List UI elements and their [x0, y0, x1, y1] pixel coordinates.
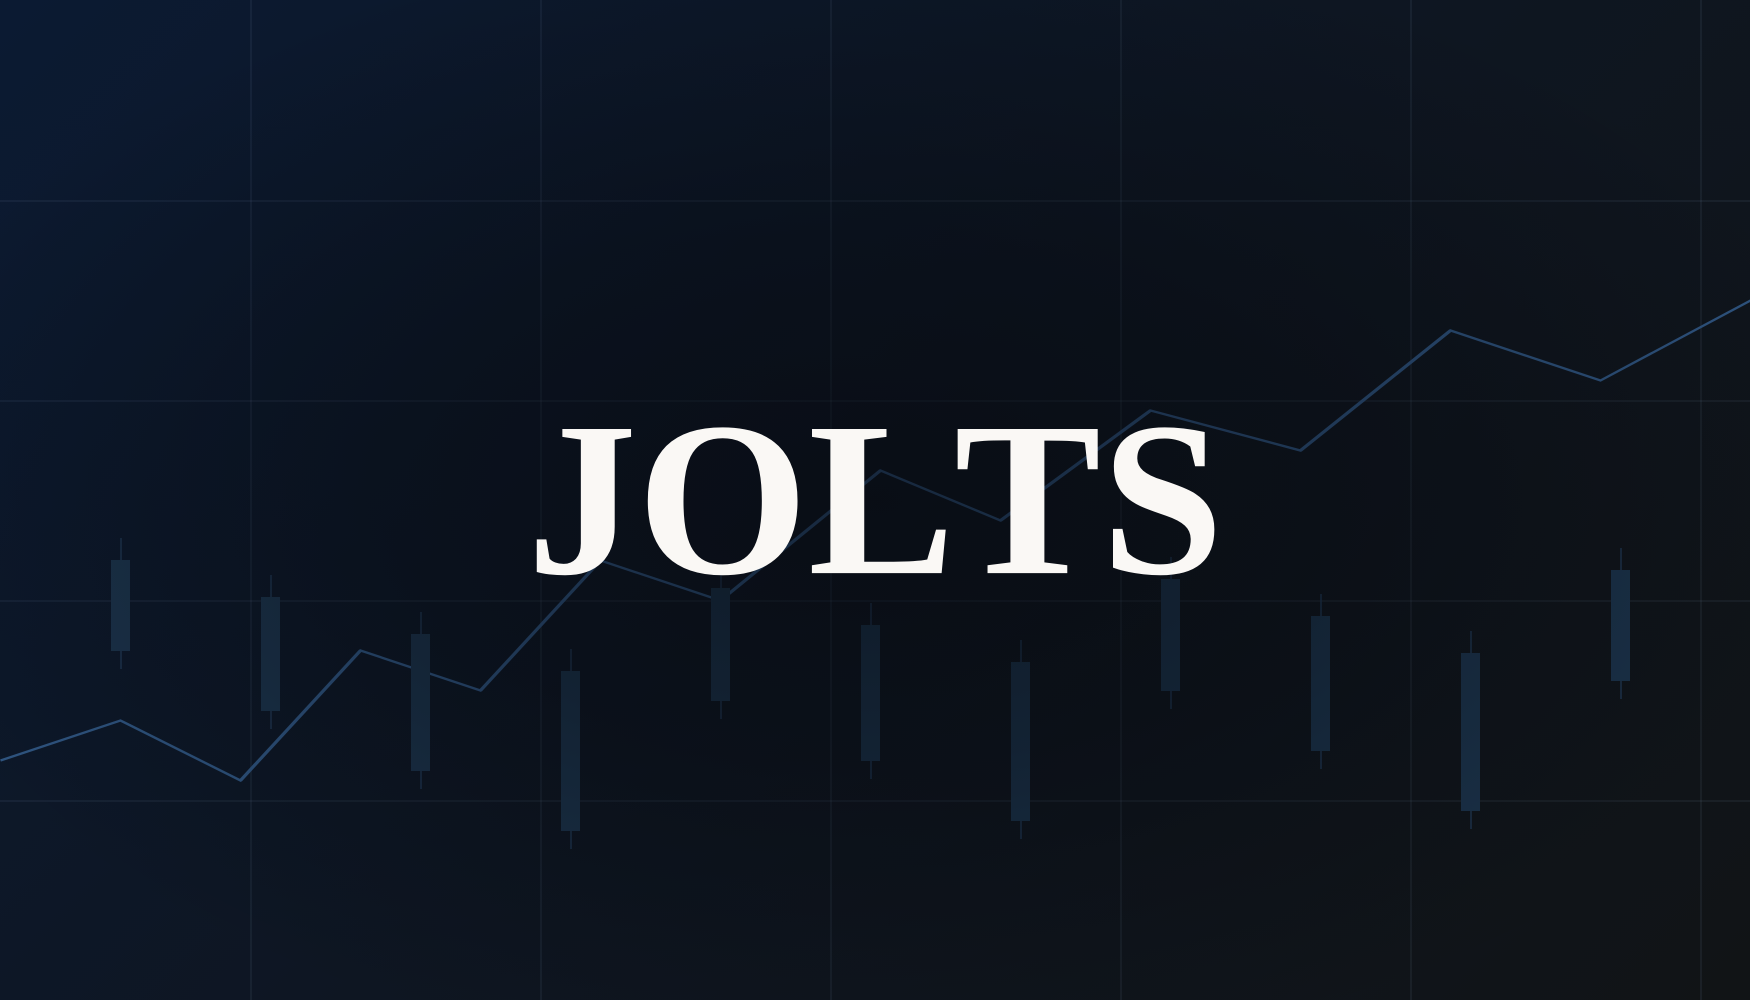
title [527, 377, 1224, 621]
trend line [0, 300, 1750, 780]
title: S [1101, 377, 1224, 621]
candlesticks [111, 538, 1630, 849]
title: T [954, 377, 1101, 621]
title: J [527, 377, 637, 621]
title: O [637, 377, 808, 621]
title: L [808, 377, 955, 621]
